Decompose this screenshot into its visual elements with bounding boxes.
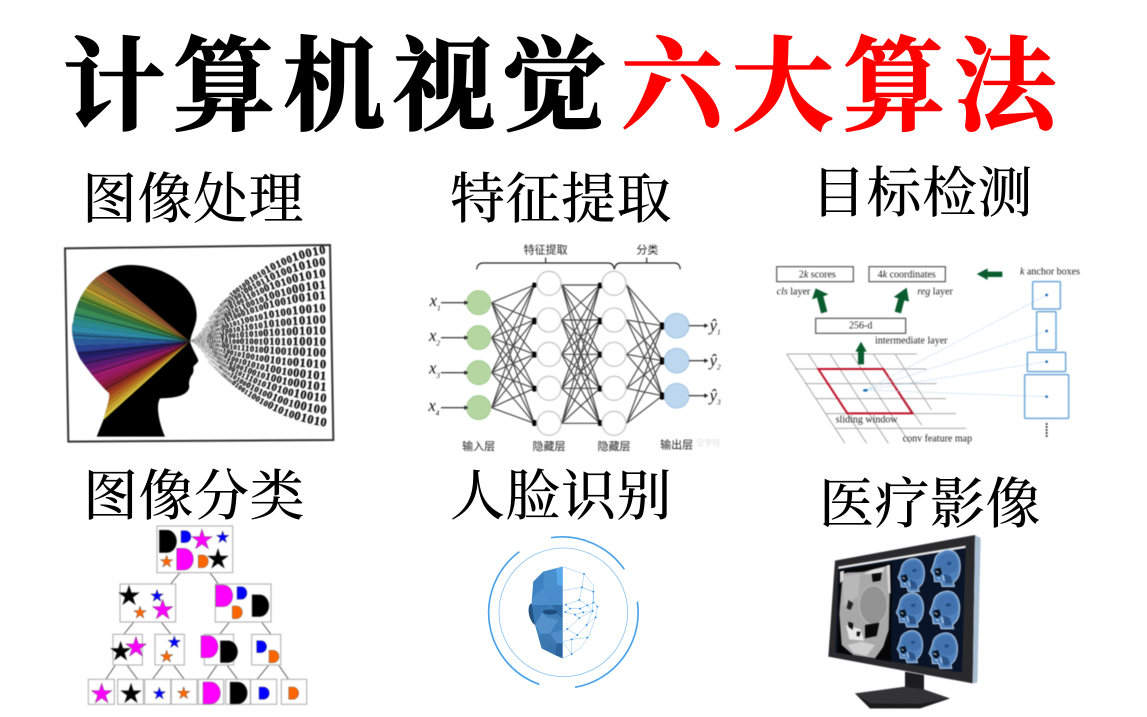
256-d box: 256-d [849,321,872,332]
output labels: ŷ [708,316,718,335]
coordinates box [869,267,945,282]
CT scan panel [837,562,892,662]
detection labels: intermediate layer [875,336,948,347]
layer labels: 输入层 [462,439,495,453]
binary digit fan: 010100101010010010100101100101001000101 [198,280,326,336]
input layer nodes [467,291,491,420]
detection labels: k anchor boxes [1020,266,1080,277]
input labels [427,291,441,417]
title [63,32,1065,145]
binary digit fan: 010100101010010010101001010101001000101 [194,342,326,381]
heading: medical imaging: 医疗影像 [819,474,1041,535]
second level shapes [119,585,269,619]
output labels: 2 [717,362,721,371]
panel: image processing illustration [63,243,336,444]
binary digit fan: 101001010100101001010100010010101010010 [191,336,326,347]
input labels: x [428,326,437,345]
arrowheads [532,283,664,426]
binary digit fan: 101001010100101001010100100101001000101 [197,346,326,392]
face: wireframe half [563,567,598,658]
tree boxes [88,526,307,704]
binary digit fan: 010100101010010010101001010100101001010 [191,325,326,342]
layer labels [462,437,720,453]
input labels: 3 [435,371,440,380]
binary digit fan: 010010101001010100100101100101010010010 [192,302,326,340]
detection labels: sliding window [836,415,898,426]
inner ring [499,548,628,677]
score box [777,267,853,282]
detection labels: reg layer [917,286,953,297]
leaf shapes [91,682,299,704]
third level shapes [111,636,279,663]
monitor frame [828,535,975,683]
layer labels: 隐藏层 [532,440,566,453]
layer labels: 空字符 [696,438,720,448]
title: red part: 六大算法 [621,32,1065,145]
title: black part: 计算机视觉 [63,32,613,145]
binary digit fan: 100101010010100101010100110100101001010 [201,268,326,331]
face: polygon half [529,567,563,658]
head silhouette [72,265,198,437]
binary digit fan: 010100101010010010101001100100101001010 [208,360,328,428]
score box: 2k scores [799,269,836,280]
screen [835,547,966,673]
binary digit fan: 010010101001010100101001001011010010100 [204,256,326,326]
braces [477,258,680,269]
binary digit fan: 100101010010100101010100010100100100100 [204,354,328,415]
output layer nodes [664,313,689,408]
rainbow fan [71,271,190,420]
detection labels [777,266,1080,445]
green arrows [812,268,1002,364]
binary digit fan: 100101010010100101010010100100101001010 [192,341,327,370]
feature map grid [787,354,966,443]
256-d box [816,318,906,333]
layer labels: 输出层 [660,437,693,451]
top label: classification: 分类 [636,242,658,256]
panel: medical monitor illustration [828,534,982,710]
output labels: 1 [717,327,721,336]
detection labels: conv feature map [903,434,972,445]
top label: feature extraction: 特征提取 [524,242,568,256]
heading: image classification: 图像分类 [83,466,305,527]
input labels: 4 [436,408,440,417]
binary digit fan: 101001010100101001010010010101010010010 [208,245,326,320]
heading: face recognition: 人脸识别 [450,466,672,527]
window centre point [863,389,868,392]
input labels: x [429,291,438,310]
heading: object detection: 目标检测 [811,163,1033,224]
binary digit fan: 101001010100101001010100010100100100101 [194,290,326,338]
layer labels: 隐藏层 [598,440,630,453]
network connections [492,285,662,423]
hidden layer nodes [537,271,626,435]
detection labels: cls layer [777,286,811,297]
anchor centre dots [1045,294,1048,398]
monitor silver edge [973,535,981,683]
panel: face recognition illustration [488,536,639,688]
tree arrows [106,573,288,679]
picture frame [65,245,333,442]
input labels: x [427,396,436,415]
projection lines [865,295,1047,397]
binary digit fan: 100101010010100101010010110101010010100 [190,314,326,341]
input labels: 2 [436,338,440,347]
input labels: 1 [437,303,441,312]
ellipsis dots [1046,423,1048,437]
screen top bar [838,546,966,569]
binary digit fan: 010010101001010100100101110101010010010 [200,350,328,403]
sliding window [818,369,912,413]
MRI panels [896,550,960,668]
monitor stand [855,672,950,708]
outer arcs [489,537,638,687]
heading: image processing: 图像处理 [82,169,304,230]
heading: feature extraction: 特征提取 [450,169,672,230]
output labels: 3 [716,397,721,406]
anchor boxes [1025,282,1069,418]
binary digit fan: 010010101001010100100101110100100100100 [190,340,326,358]
coordinates box: 4k coordinates [878,269,936,280]
panel: object detection diagram [775,265,1080,445]
output labels: ŷ [708,351,718,370]
input and output arrows [441,303,706,408]
binary digit fan [190,245,328,428]
panel: classification tree [87,524,308,706]
input labels: x [428,359,437,378]
output labels [708,316,721,406]
output labels: ŷ [708,386,718,405]
root shapes [159,529,229,570]
panel: neural network diagram [427,242,722,453]
